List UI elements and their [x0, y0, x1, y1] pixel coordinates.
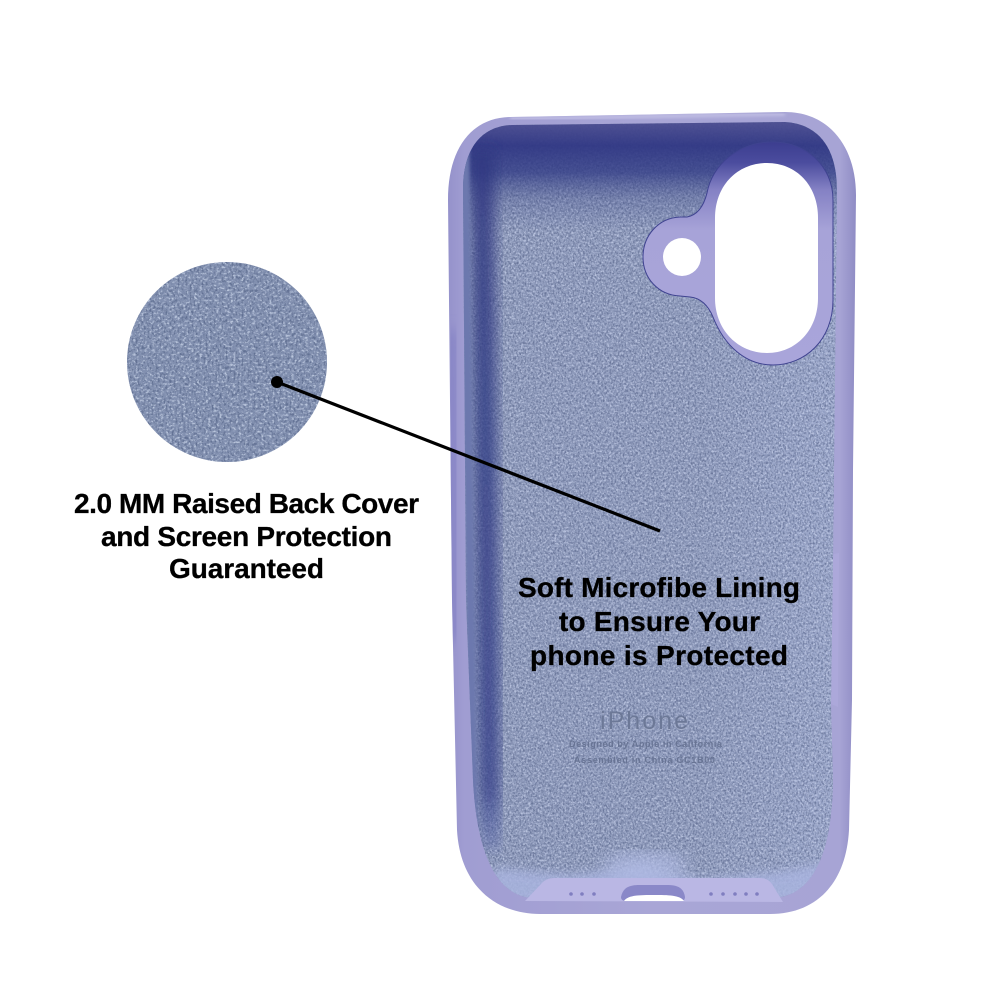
speaker dots — [569, 892, 759, 896]
right caption: Soft Microfibe Lining — [518, 572, 800, 603]
right caption: phone is Protected — [530, 640, 788, 671]
case outer rim — [448, 112, 856, 914]
bottom tab — [525, 878, 783, 902]
flash hole — [663, 238, 701, 276]
left caption: 2.0 MM Raised Back Cover — [74, 488, 419, 519]
embossed iPhone mark: Assembled in China GC1B00 — [574, 755, 715, 765]
charging port — [621, 885, 685, 901]
callout pointer line — [271, 376, 660, 531]
left caption — [74, 488, 419, 584]
embossed iPhone mark — [569, 707, 723, 765]
right side button recess — [829, 553, 839, 707]
phone case — [448, 112, 856, 915]
camera surround — [643, 142, 833, 365]
embossed iPhone mark: Designed by Apple in California — [569, 739, 723, 749]
left caption: Guaranteed — [169, 553, 324, 584]
left caption: and Screen Protection — [101, 521, 392, 552]
right caption: to Ensure Your — [559, 606, 760, 637]
right caption — [518, 572, 800, 671]
rim shading — [451, 114, 785, 640]
camera opening — [715, 163, 818, 353]
embossed iPhone mark: iPhone — [600, 708, 688, 736]
embossed iPhone mark: iPhone — [600, 707, 688, 735]
magnified fabric circle — [125, 260, 330, 465]
case microfibre lining — [450, 115, 850, 915]
